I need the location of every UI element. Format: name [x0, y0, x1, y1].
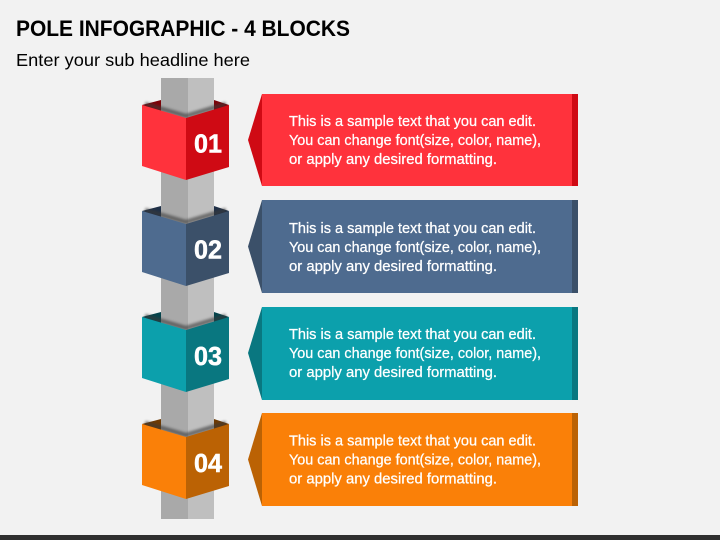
- cube back: [142, 206, 229, 218]
- text: This is a sample text that you can edit.: [289, 434, 536, 450]
- pole: [161, 78, 214, 519]
- number: 01: [194, 130, 222, 158]
- text: [289, 114, 541, 168]
- subtitle: Enter your sub headline here: [16, 50, 250, 70]
- text: [289, 221, 541, 275]
- pole shadow: [145, 316, 226, 328]
- number: 03: [194, 343, 222, 371]
- cube right face: [186, 317, 229, 392]
- pole shadow: [145, 210, 226, 222]
- banner arrow: [248, 307, 262, 400]
- banner: [262, 307, 578, 400]
- text: This is a sample text that you can edit.: [289, 221, 536, 237]
- banner arrow: [248, 200, 262, 293]
- cube left face: [142, 211, 186, 286]
- text: You can change font(size, color, name),: [289, 240, 541, 256]
- cube right face: [186, 211, 229, 286]
- pole shadow: [145, 104, 226, 116]
- bottom bar: [0, 535, 720, 540]
- text: You can change font(size, color, name),: [289, 133, 541, 149]
- block 4: orange: [142, 413, 578, 506]
- text: You can change font(size, color, name),: [289, 452, 541, 468]
- cube right face: [186, 424, 229, 499]
- text: This is a sample text that you can edit.: [289, 327, 536, 343]
- banner: [262, 94, 578, 186]
- text: This is a sample text that you can edit.: [289, 114, 536, 130]
- text: [289, 434, 541, 488]
- block 3: teal: [142, 307, 578, 400]
- cube back: [142, 100, 229, 112]
- text: or apply any desired formatting.: [289, 259, 497, 275]
- cube back: [142, 419, 229, 431]
- cube left face: [142, 105, 186, 180]
- banner: [262, 413, 578, 506]
- banner arrow: [248, 94, 262, 186]
- text: or apply any desired formatting.: [289, 152, 497, 168]
- text: or apply any desired formatting.: [289, 472, 497, 488]
- banner arrow: [248, 413, 262, 506]
- banner edge: [572, 307, 578, 400]
- cube right face: [186, 105, 229, 180]
- text: You can change font(size, color, name),: [289, 346, 541, 362]
- banner edge: [572, 94, 578, 186]
- cube left face: [142, 317, 186, 392]
- text: [289, 327, 541, 381]
- pole shadow: [145, 423, 226, 435]
- number: 02: [194, 236, 222, 264]
- cube left face: [142, 424, 186, 499]
- block 2: blue: [142, 200, 578, 293]
- cube back: [142, 312, 229, 324]
- banner: [262, 200, 578, 293]
- banner edge: [572, 413, 578, 506]
- block 1: red: [142, 94, 578, 186]
- title: POLE INFOGRAPHIC - 4 BLOCKS: [16, 16, 350, 41]
- text: or apply any desired formatting.: [289, 365, 497, 381]
- number: 04: [194, 450, 223, 478]
- banner edge: [572, 200, 578, 293]
